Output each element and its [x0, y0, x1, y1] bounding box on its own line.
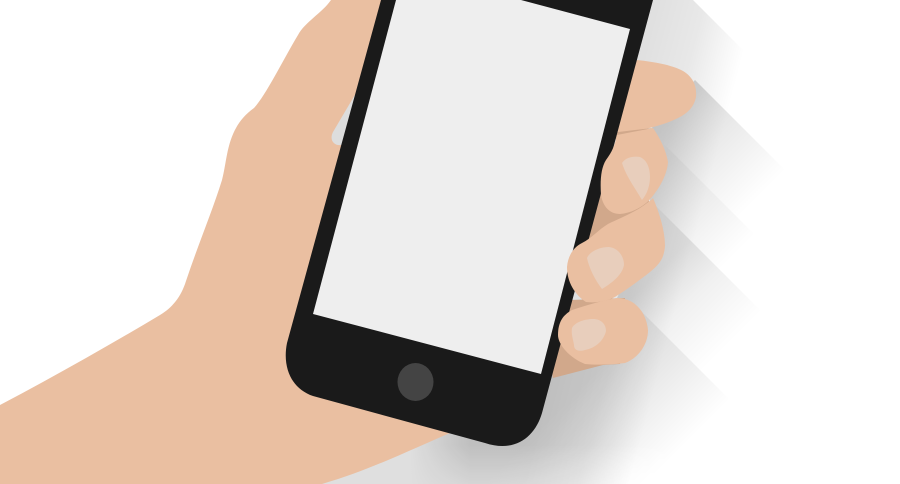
shadow: long cast shadows — [322, 0, 765, 484]
nail: little — [572, 319, 606, 351]
phone: body — [286, 0, 653, 446]
finger: middle — [601, 128, 668, 214]
shadow: ring finger — [617, 200, 900, 484]
nail: middle — [622, 157, 650, 200]
finger crease: under index — [610, 128, 652, 141]
thumb gap highlight — [332, 93, 356, 145]
hand: palm and arm — [0, 0, 500, 484]
finger: index — [600, 60, 696, 135]
shadow: phone — [300, 0, 900, 484]
shadow: middle finger — [650, 140, 900, 450]
finger: little — [558, 298, 648, 365]
phone: home button — [398, 363, 434, 401]
palm shadow: below little finger — [540, 298, 625, 378]
shadow: index finger — [650, 80, 900, 380]
finger: ring — [567, 198, 665, 302]
phone: screen — [313, 0, 630, 374]
shadow: little finger and phone corner — [426, 312, 710, 484]
finger crease: between middle and ring — [575, 190, 650, 248]
nail: ring — [587, 247, 624, 289]
